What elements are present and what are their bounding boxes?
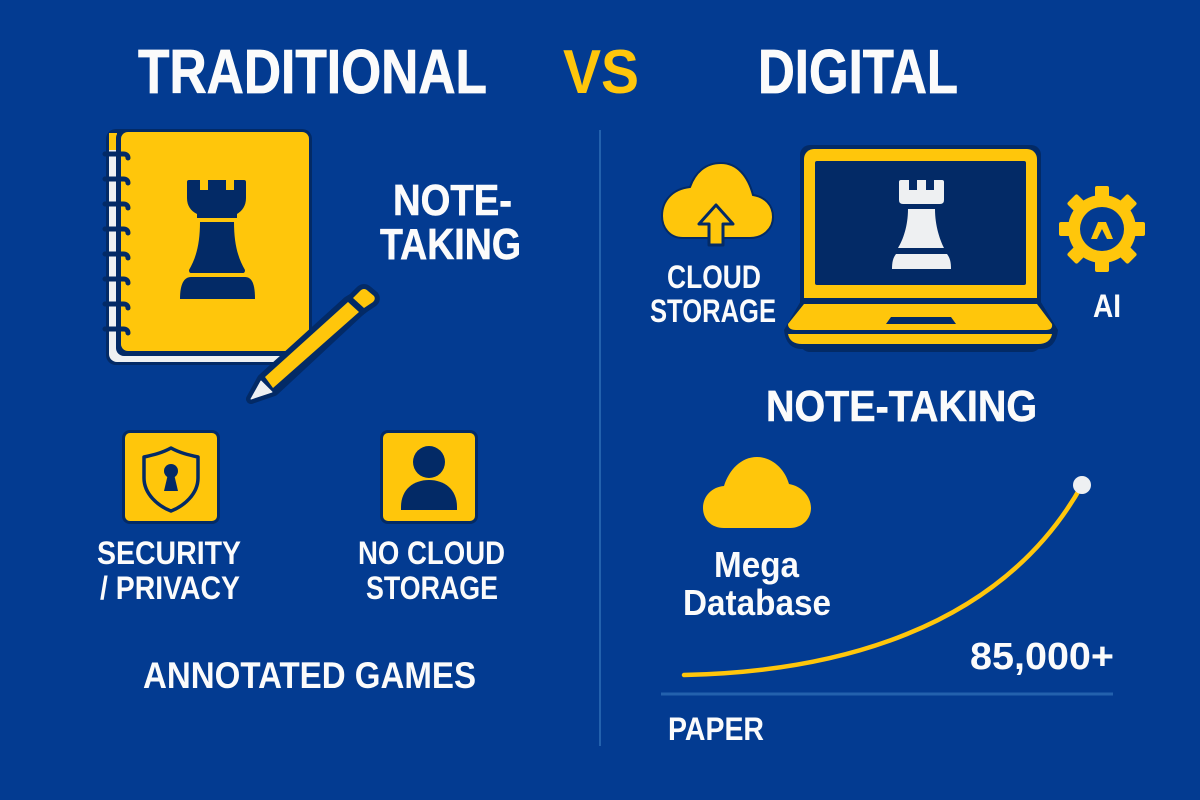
heading: note-taking traditional: NOTE- — [393, 176, 512, 225]
label: mega database: Database — [683, 582, 831, 623]
icon: white rook — [892, 180, 951, 269]
title: vs: VS — [563, 38, 639, 107]
icon: pencil — [251, 289, 375, 399]
heading: note-taking traditional: TAKING — [380, 220, 521, 269]
label: no cloud storage: NO CLOUD — [358, 535, 505, 571]
label: security privacy: / PRIVACY — [100, 570, 240, 606]
icon: spiral binding — [105, 154, 128, 333]
title: digital: DIGITAL — [758, 38, 958, 107]
label: cloud storage: CLOUD — [667, 259, 761, 295]
icon: mega database cloud — [703, 457, 811, 528]
heading: note-taking traditional — [380, 176, 521, 269]
stat: 85,000+: 85,000+ — [970, 636, 1114, 678]
label: no cloud storage: STORAGE — [366, 570, 498, 606]
icon: ai gear — [1059, 186, 1145, 272]
icon: rook — [180, 180, 255, 299]
icon: notebook with rook — [105, 129, 312, 365]
chart: growth curve — [661, 476, 1113, 694]
label: paper: PAPER — [668, 711, 764, 747]
heading: note-taking digital: NOTE-TAKING — [766, 382, 1037, 431]
label: ai: AI — [1093, 288, 1121, 324]
label: mega database: Mega — [714, 544, 800, 585]
label: mega database — [683, 544, 831, 623]
icon: cloud upload — [662, 163, 773, 245]
icon: security shield tile — [122, 430, 220, 524]
label: security privacy: SECURITY — [97, 535, 241, 571]
label: cloud storage: STORAGE — [650, 293, 776, 329]
icon: person tile — [380, 430, 478, 524]
title: traditional: TRADITIONAL — [138, 38, 487, 107]
label: no cloud storage — [358, 535, 505, 606]
icon: laptop — [784, 145, 1058, 352]
label: annotated games: ANNOTATED GAMES — [143, 655, 476, 696]
label: cloud storage — [650, 259, 776, 329]
label: security privacy — [97, 535, 241, 606]
